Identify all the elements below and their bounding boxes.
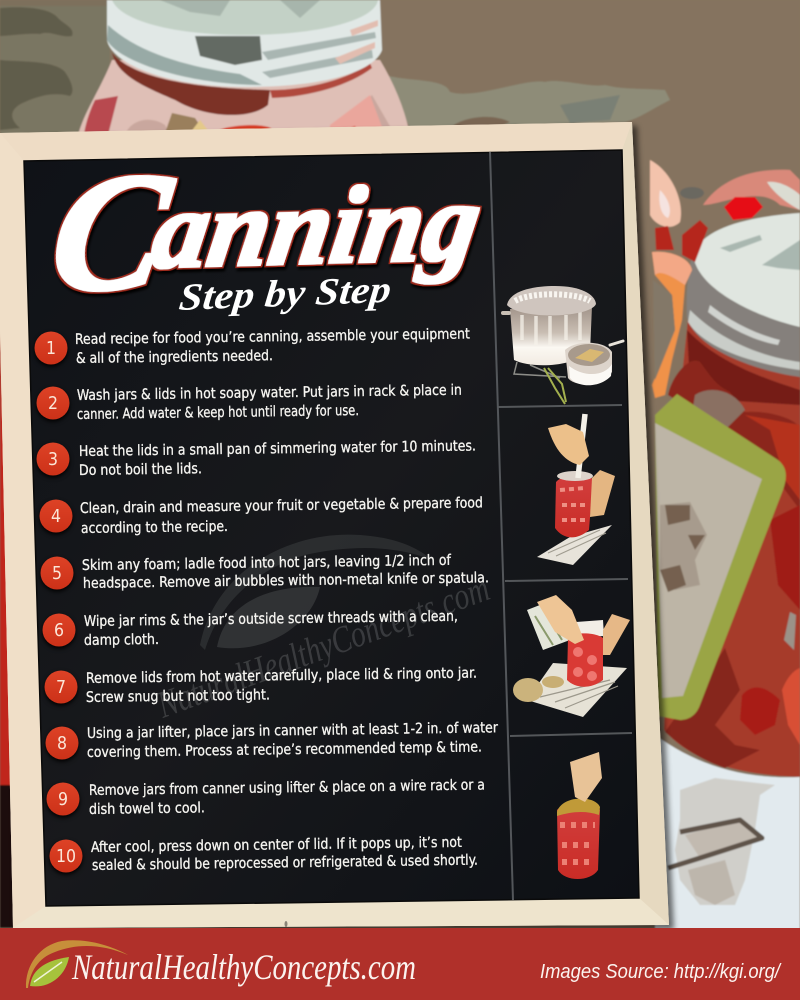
chalkboard wood frame: [0, 122, 674, 932]
step 7: 7: [56, 678, 66, 698]
logo: arc and leaf: [26, 940, 128, 988]
table cloth: [655, 735, 800, 930]
step 5: Skim any foam; ladle food into hot jars, leaving 1/2 inch of: [82, 553, 451, 574]
step 2: 2: [48, 394, 58, 414]
right side jar body: [664, 300, 800, 777]
right jar lid: [687, 213, 800, 377]
step 1: & all of the ingredients needed.: [76, 348, 273, 367]
step 4: Clean, drain and measure your fruit or vegetable & prepare food: [80, 495, 483, 517]
step 6: [42, 609, 458, 649]
vertical divider: [490, 152, 513, 900]
watermark leaf: [217, 587, 320, 648]
step 9: [46, 777, 485, 818]
fruit and peel right of frame: [650, 160, 681, 227]
title: Canning: C: [40, 137, 183, 327]
step 7: Screw snug but not too tight.: [86, 687, 270, 706]
step 3: Do not boil the lids.: [79, 461, 202, 479]
step 6: damp cloth.: [84, 632, 159, 649]
step 8: covering them. Process at recipe’s recommended temp & time.: [87, 739, 482, 761]
step 6: Wipe jar rims & the jar’s outside screw threads with a clean,: [84, 609, 458, 630]
step 9: Remove jars from canner using lifter & place on a wire rack or a: [89, 777, 485, 799]
step 10: sealed & should be reprocessed or refrigerated & used shortly.: [92, 853, 478, 874]
top jar lid: [107, 0, 382, 87]
olive patches upper left: [0, 0, 110, 135]
illustration: canner pot and small pan: [501, 286, 623, 404]
title: Canning: anning: [145, 160, 489, 292]
step 7: Remove lids from hot water carefully, place lid & ring onto jar.: [86, 666, 477, 687]
illustration: wiping jar rim with cloth: [513, 595, 630, 717]
subtitle: Step by Step: Step by Step: [177, 269, 393, 319]
step 4: according to the recipe.: [81, 519, 228, 537]
step 10: After cool, press down on center of lid. If it pops up, it’s not: [91, 835, 462, 856]
top jar body: [78, 60, 410, 135]
step 1: Read recipe for food you’re canning, assemble your equipment: [75, 326, 470, 348]
brand name: NaturalHealthyConcepts.com: [71, 947, 416, 987]
step 8: 8: [57, 734, 67, 754]
flower on label: [660, 502, 707, 590]
illustration: sealing jar lid: [557, 752, 602, 879]
illustration: stirring jar with spatula: [537, 414, 615, 565]
step 4: [40, 495, 483, 537]
step 2: canner. Add water & keep hot until ready for use.: [77, 403, 359, 423]
step 1: [34, 326, 470, 367]
watermark: NaturalHealthyConcepts.com: [151, 567, 495, 727]
step 7: [44, 666, 477, 706]
step 5: [40, 553, 489, 592]
green label tag: [655, 394, 786, 720]
step 8: [46, 720, 499, 761]
step 3: [36, 438, 476, 479]
step 1: 1: [46, 339, 56, 359]
step 9: 9: [58, 790, 68, 810]
step 9: dish towel to cool.: [89, 800, 205, 818]
horizontal dividers: [498, 405, 632, 736]
step 2: [36, 383, 462, 423]
step 3: 3: [48, 450, 58, 470]
step 10: 10: [56, 847, 76, 867]
step 3: Heat the lids in a small pan of simmering water for 10 minutes.: [79, 438, 476, 460]
step 2: Wash jars & lids in hot soapy water. Put jars in rack & place in: [77, 383, 462, 404]
image source credit: Images Source: http://kgi.org/: [540, 961, 782, 983]
step 5: headspace. Remove air bubbles with non-metal knife or spatula.: [83, 570, 489, 592]
left strip behind frame: [0, 330, 16, 785]
step 10: [50, 835, 478, 874]
step 5: 5: [52, 564, 62, 584]
footer band: [0, 928, 800, 1000]
step 4: 4: [51, 507, 61, 527]
step 6: 6: [54, 621, 64, 641]
step 8: Using a jar lifter, place jars in canner with at least 1-2 in. of water: [87, 720, 499, 742]
chalkboard surface: [24, 150, 639, 906]
